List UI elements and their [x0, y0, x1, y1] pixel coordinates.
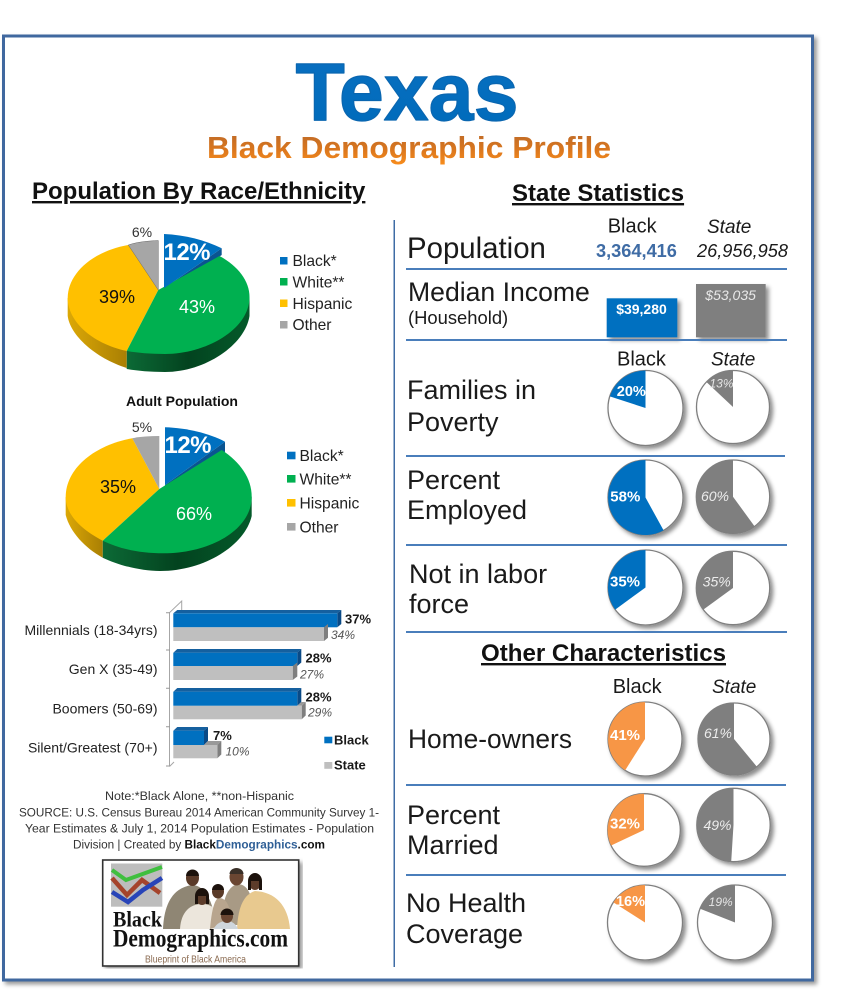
bars: millennials [173, 610, 371, 642]
row: no health coverage [406, 885, 772, 960]
legend: adult population: Black* [300, 448, 344, 465]
row: not in labor force [409, 550, 770, 625]
row: population: Population [407, 232, 546, 265]
pie chart: total population: 6% [132, 224, 152, 240]
logo family photo [163, 868, 290, 929]
pie: home-owners state 61%: 61% [704, 725, 732, 741]
pie: health black 16% [608, 885, 682, 960]
logo wordmark: Demographics.com [113, 926, 288, 953]
legend: adult population [287, 448, 360, 536]
legend: adult population: White** [300, 472, 352, 488]
bar chart legend: Black [334, 732, 369, 748]
bars: silent/greatest [173, 727, 250, 759]
legend: adult population: Other [300, 520, 338, 536]
heading: population by race: Population By Race/Ethnicity [32, 178, 366, 205]
row: home-owners [408, 676, 770, 776]
pie: married state 49%: 49% [703, 817, 732, 833]
pie chart: adult population: 12% [164, 432, 212, 459]
income bar: state [696, 284, 766, 337]
logo wordmark [113, 907, 288, 966]
row: families in poverty: Black [617, 348, 667, 370]
pie: employed state 60% [696, 460, 770, 533]
logo wordmark: Black [113, 907, 163, 932]
row: home-owners: State [712, 677, 756, 698]
row: families in poverty: Poverty [407, 407, 499, 437]
row: median income [408, 277, 766, 337]
income bar: state: $53,035 [704, 287, 756, 303]
bar chart category labels: Gen X (35-49) [69, 661, 158, 677]
heading: adult population: Adult Population [126, 393, 238, 409]
row: families in poverty [407, 348, 770, 446]
row: not in labor force: Not in labor [409, 559, 547, 589]
pie chart: adult population: 66% [176, 504, 212, 524]
bar chart legend: State [334, 758, 366, 772]
pie chart: adult population: 35% [100, 477, 136, 497]
heading: other characteristics: Other Characteristics [481, 640, 726, 667]
bars: gen x [173, 649, 332, 681]
pie: married black 32% [608, 794, 680, 866]
legend: total population: Hispanic [292, 296, 353, 313]
bar chart legend [324, 732, 369, 772]
pie: labor state 35% [696, 551, 770, 625]
pie chart: total population [68, 224, 250, 372]
pie: home-owners black 41% [608, 702, 682, 776]
row: population: 26,956,958 [696, 241, 789, 261]
pie: health black 16%: 16% [616, 894, 645, 910]
pie chart: adult population [66, 419, 252, 571]
pie: poverty black 20% [608, 370, 683, 446]
pie: home-owners black 41%: 41% [610, 727, 640, 744]
pie chart: total population: 39% [99, 287, 135, 307]
pie: labor black 35% [608, 550, 683, 625]
income bar: black: $39,280 [616, 301, 667, 317]
title: Texas [296, 47, 518, 138]
row: no health coverage: No Health [406, 888, 526, 918]
source notes: SOURCE: U.S. Census Bureau 2014 American Community Survey 1- [19, 806, 379, 820]
row: families in poverty: Families in [407, 375, 536, 405]
bar chart category labels: Boomers (50-69) [52, 700, 158, 716]
bars: boomers: 28% [306, 690, 332, 705]
bars: silent/greatest: 10% [226, 745, 250, 759]
pie: home-owners state 61% [698, 703, 770, 775]
row: home-owners: Black [613, 676, 663, 698]
pie: married black 32%: 32% [610, 815, 640, 832]
legend: total population: Black* [292, 253, 337, 270]
row: percent employed: Percent [407, 465, 501, 495]
row: percent married: Percent [407, 800, 501, 830]
row: families in poverty: State [711, 350, 755, 370]
bars: millennials: 37% [345, 611, 371, 626]
row: population: Black [608, 216, 658, 238]
row: percent employed: Employed [407, 495, 527, 525]
row: not in labor force: force [409, 589, 469, 619]
bars: boomers: 29% [307, 706, 332, 720]
row: population: 3,364,416 [596, 241, 677, 261]
pie: employed black 58%: 58% [610, 489, 640, 506]
bars: gen x: 28% [306, 651, 332, 666]
bar chart: generations [24, 601, 371, 772]
source notes: Year Estimates & July 1, 2014 Population Estimates - Population [25, 822, 374, 836]
pie: employed state 60%: 60% [701, 488, 729, 504]
source notes: Note:*Black Alone, **non-Hispanic [105, 789, 294, 803]
pie: poverty state 13% [696, 370, 770, 444]
bars: silent/greatest: 7% [213, 728, 232, 743]
pie chart: total population: 12% [164, 239, 210, 266]
row: percent married [407, 788, 770, 866]
pie: married state 49% [697, 788, 770, 862]
logo: BlackDemographics.com [103, 860, 299, 966]
bars: gen x: 27% [299, 667, 324, 681]
legend: total population: Other [292, 317, 332, 334]
pie: labor black 35%: 35% [610, 574, 640, 591]
subtitle: Black Demographic Profile [207, 130, 611, 165]
pie: health state 19% [698, 885, 772, 960]
row: percent married: Married [407, 830, 499, 860]
bar chart category labels: Millennials (18-34yrs) [24, 622, 158, 638]
row: home-owners: Home-owners [408, 724, 572, 754]
row: population [407, 216, 789, 265]
source notes: Division | Created by BlackDemographics.com [73, 838, 325, 852]
column divider [394, 220, 395, 967]
logo chart icon [111, 864, 162, 907]
bar chart category labels: Silent/Greatest (70+) [28, 739, 158, 755]
heading: state statistics: State Statistics [512, 180, 684, 207]
source notes [19, 789, 379, 852]
legend: adult population: Hispanic [300, 496, 360, 512]
row: no health coverage: Coverage [406, 919, 523, 949]
bars: millennials: 34% [331, 628, 355, 642]
pie: poverty state 13%: 13% [709, 376, 734, 390]
pie: labor state 35%: 35% [703, 574, 731, 590]
bar chart category labels [24, 622, 158, 755]
pie chart: total population: 43% [179, 297, 215, 317]
pie: health state 19%: 19% [709, 895, 733, 909]
pie: employed black 58% [608, 460, 683, 535]
legend: total population [280, 253, 353, 334]
bars: boomers [173, 688, 332, 720]
income bar: black [607, 298, 677, 337]
row: median income: Median Income [408, 277, 590, 307]
row: population: State [707, 217, 751, 238]
row: median income: (Household) [408, 307, 508, 328]
logo wordmark: Blueprint of Black America [145, 954, 246, 966]
legend: total population: White** [292, 274, 344, 292]
pie: poverty black 20%: 20% [617, 384, 646, 400]
pie chart: adult population: 5% [132, 419, 152, 435]
row: percent employed [407, 460, 770, 535]
